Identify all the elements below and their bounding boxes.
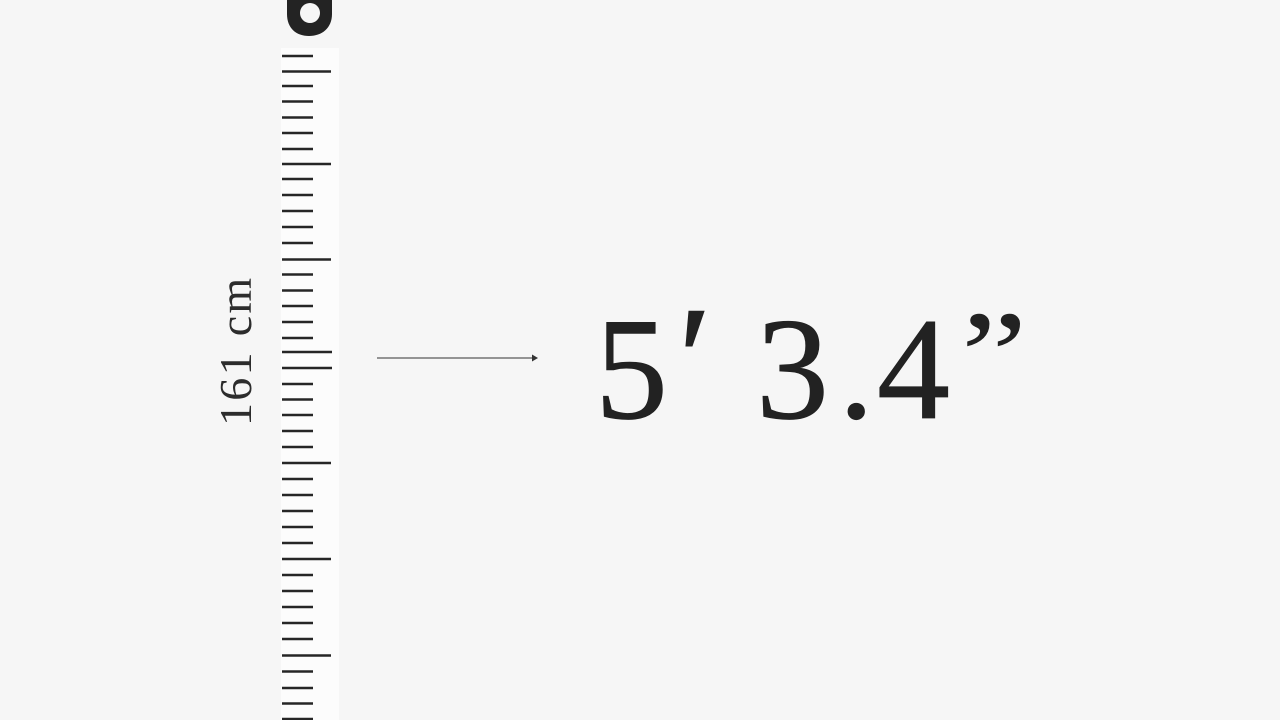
feet and inches value: '	[657, 278, 716, 438]
centimetre label: 161 cm	[210, 276, 261, 426]
tape hook icon	[287, 0, 332, 36]
feet and inches value	[595, 278, 1027, 450]
tape strip	[281, 48, 339, 720]
tape tick marks	[282, 56, 332, 719]
arrow	[377, 354, 538, 362]
feet and inches value: 3	[756, 288, 829, 450]
feet and inches value: .	[838, 288, 874, 450]
feet and inches value: 4	[877, 288, 950, 450]
feet and inches value: 5	[595, 288, 668, 450]
measuring tape	[281, 0, 339, 720]
feet and inches value: ”	[961, 285, 1027, 425]
